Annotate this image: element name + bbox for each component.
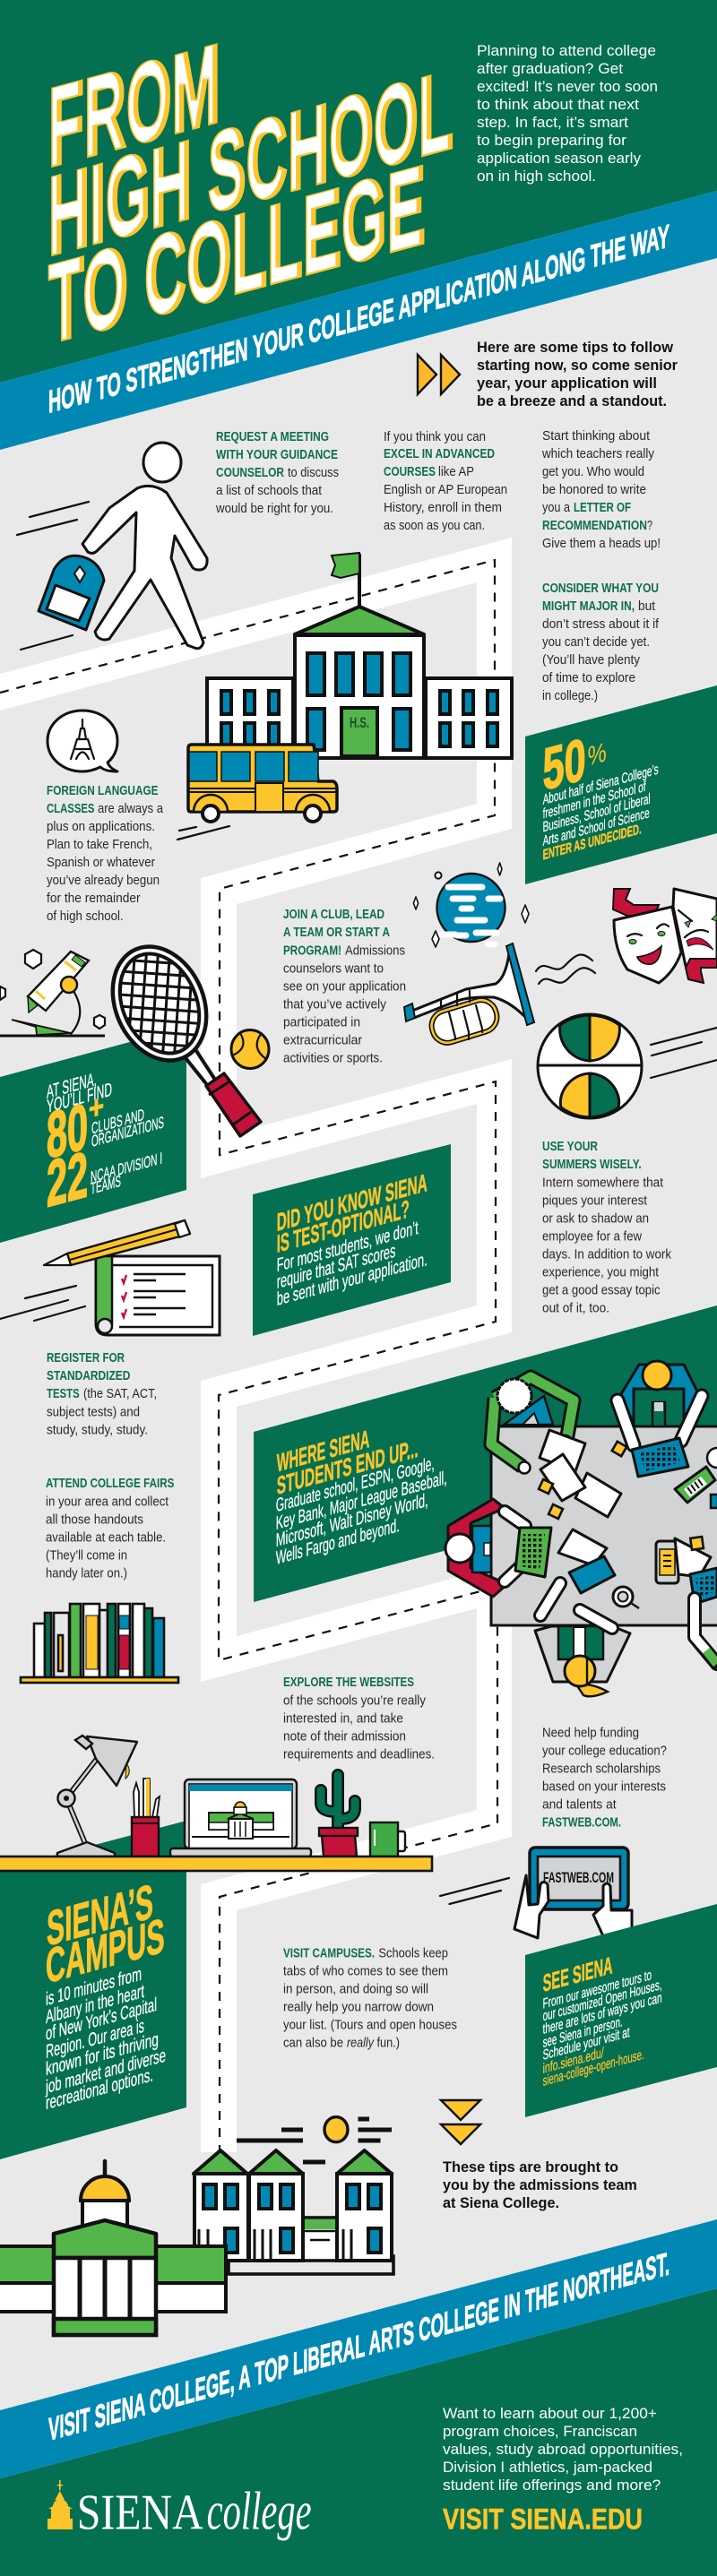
text: need help funding: FASTWEB.COM. xyxy=(542,1815,621,1830)
text: join a club xyxy=(283,908,406,1066)
illustration: hands on tablet: FASTWEB.COM xyxy=(543,1869,614,1886)
text: consider major: MIGHT MAJOR IN, xyxy=(542,599,635,614)
intro paragraph: to think about that next xyxy=(477,96,639,113)
text: visit campuses: can also be xyxy=(283,2036,343,2050)
panel: Siena's campus: of New York’s Capital xyxy=(46,1994,157,2045)
text: advanced courses: as soon as you can. xyxy=(384,519,485,533)
text: college fairs: all those handouts xyxy=(46,1512,143,1527)
logo: Siena College xyxy=(48,2480,312,2541)
text: need help funding: Research scholarships xyxy=(542,1762,661,1776)
illustration: pencil and checklist xyxy=(0,1220,220,1335)
text: foreign language: Plan to take French, xyxy=(47,838,152,852)
text: use your summers: get a good essay topic xyxy=(542,1283,661,1297)
illustration: books on shelf xyxy=(21,1604,178,1683)
blue banner: how to strengthen xyxy=(0,191,717,450)
text: need help funding: and talents at xyxy=(542,1797,617,1812)
desk lamp xyxy=(57,1736,137,1857)
tablet and magnifier xyxy=(569,1556,639,1608)
text: use your summers: or ask to shadow an xyxy=(542,1211,649,1226)
tips intro text: year, your application will xyxy=(477,375,657,392)
laptop xyxy=(170,1779,311,1857)
panel: 50 percent undecided xyxy=(525,685,717,884)
text: advanced courses: EXCEL IN ADVANCED xyxy=(384,447,495,461)
footer text xyxy=(443,2405,683,2494)
illustration: hands on tablet xyxy=(440,1848,632,1940)
illustration: high school building: H.S. xyxy=(350,714,369,731)
text: visit campuses: your list. (Tours and open houses xyxy=(283,2018,457,2032)
text: advanced courses: History, enroll in them xyxy=(384,501,502,515)
text: join a club: see on your application xyxy=(283,980,406,995)
text: join a club: counselors want to xyxy=(283,962,384,977)
illustration: school bus xyxy=(177,745,337,840)
text: request a meeting: COUNSELOR xyxy=(216,466,284,480)
person: green sleeves xyxy=(491,1377,574,1473)
text: letter of recommendation: which teachers really xyxy=(541,447,655,461)
tips intro text xyxy=(477,339,678,409)
title xyxy=(48,21,454,367)
pencil cup xyxy=(132,1779,160,1857)
call to action: visit siena.edu: VISIT SIENA.EDU xyxy=(443,2503,643,2536)
text: letter of recommendation xyxy=(541,429,661,551)
text: consider major: you can’t decide yet. xyxy=(542,635,650,650)
text: join a club: PROGRAM! xyxy=(283,944,341,959)
panel: 50 percent undecided: freshmen in the School of xyxy=(543,779,646,822)
text: letter of recommendation: get you. Who would xyxy=(542,465,644,479)
text: college fairs: (They’ll come in xyxy=(46,1548,127,1563)
text: letter of recommendation: LETTER OF xyxy=(574,501,631,515)
panel: clubs and teams: ORGANIZATIONS xyxy=(91,1113,164,1150)
footer text: Division I athletics, jam-packed xyxy=(443,2459,652,2476)
panel: see Siena: From our awesome tours to xyxy=(543,1967,652,2012)
text: letter of recommendation: ? xyxy=(647,519,652,533)
illustration: students at table xyxy=(445,1361,717,1696)
winding white path xyxy=(0,538,512,2152)
text: visit campuses xyxy=(283,1946,457,2050)
text: foreign language: of high school. xyxy=(47,909,124,924)
footer green panel xyxy=(0,2288,717,2576)
footer text: program choices, Franciscan xyxy=(443,2423,637,2440)
text: college fairs: in your area and collect xyxy=(46,1495,168,1509)
panel: clubs and teams: CLUBS AND xyxy=(91,1105,144,1138)
panel: Siena's campus: known for its thriving xyxy=(46,2029,159,2080)
text: join a club: activities or sports. xyxy=(283,1052,383,1066)
text: use your summers: piques your interest xyxy=(542,1193,647,1208)
person: ponytail xyxy=(535,1583,630,1696)
icon: double arrows xyxy=(418,355,460,394)
text: register for tests: STANDARDIZED xyxy=(47,1369,130,1383)
text: letter of recommendation: be honored to write xyxy=(542,483,646,497)
logo: Siena College: college xyxy=(207,2482,312,2541)
text: join a club: JOIN A CLUB, LEAD xyxy=(283,908,384,922)
icon: microscope xyxy=(0,950,105,1036)
icon: theater masks xyxy=(613,889,717,983)
intro paragraph: after graduation? Get xyxy=(477,60,623,77)
text: request a meeting xyxy=(215,430,339,516)
text: advanced courses: like AP xyxy=(438,465,474,479)
logo: Siena College: SIENA xyxy=(77,2486,203,2541)
panel: where Siena students end up xyxy=(254,1305,717,1602)
footer text: student life offerings and more? xyxy=(443,2477,661,2494)
panel: Siena's campus: CAMPUS xyxy=(46,1908,165,1994)
text: college fairs xyxy=(46,1477,175,1581)
illustration: high school building xyxy=(207,553,512,758)
panel: clubs and teams: + xyxy=(89,1087,104,1127)
icon: trumpet xyxy=(404,943,534,1047)
panel: clubs and teams: TEAMS xyxy=(91,1171,121,1198)
text: request a meeting: REQUEST A MEETING xyxy=(216,430,329,444)
desk top xyxy=(0,1857,432,1871)
text: advanced courses: English or AP European xyxy=(384,483,507,497)
person: red sweater xyxy=(445,1499,551,1597)
panel: see Siena: Schedule your visit at xyxy=(543,2024,630,2063)
panel: did you know: be sent with your application. xyxy=(277,1248,428,1310)
text: request a meeting: WITH YOUR GUIDANCE xyxy=(216,448,338,462)
text: visit campuses: Schools keep xyxy=(378,1946,448,1960)
panel: did you know: DID YOU KNOW SIENA xyxy=(277,1168,428,1237)
text: request a meeting: to discuss xyxy=(288,466,339,480)
illustration: sun and clouds xyxy=(237,2117,392,2162)
text: letter of recommendation: Start thinking about xyxy=(542,429,650,444)
text: foreign language: for the remainder xyxy=(47,892,141,906)
panel: where Siena students end up: Microsoft, Walt Disney World, xyxy=(276,1489,428,1551)
text: explore the websites xyxy=(283,1676,435,1762)
text: visit campuses: fun.) xyxy=(376,2036,400,2050)
panel: see Siena: see Siena in person. xyxy=(543,2013,623,2051)
text: consider major xyxy=(542,582,660,703)
text: use your summers: USE YOUR xyxy=(542,1140,598,1154)
text: use your summers xyxy=(542,1140,672,1315)
panel: Siena's campus: Region. Our area is xyxy=(46,2015,144,2063)
panel: where Siena students end up: Key Bank, Major League Baseball, xyxy=(276,1467,447,1534)
text: visit campuses: really help you narrow down xyxy=(283,2000,434,2014)
panel: clubs and teams: YOU’LL FIND xyxy=(47,1079,112,1117)
text: need help funding: your college education? xyxy=(542,1744,667,1758)
panel: see Siena: info.siena.edu/ xyxy=(543,2045,604,2077)
text: advanced courses: COURSES xyxy=(384,465,436,479)
footer text: values, study abroad opportunities, xyxy=(443,2441,683,2458)
text: request a meeting: a list of schools that xyxy=(216,484,322,498)
intro paragraph xyxy=(477,42,658,185)
text: consider major: but xyxy=(638,599,655,614)
text: foreign language: CLASSES xyxy=(47,802,95,816)
text: college fairs: available at each table. xyxy=(46,1530,166,1545)
illustration: walking student with backpack xyxy=(17,443,207,650)
panel: Siena's campus: recreational options. xyxy=(46,2063,153,2114)
panel: see Siena: SEE SIENA xyxy=(543,1951,613,1997)
text: join a club: A TEAM OR START A xyxy=(283,926,390,940)
text: visit campuses: really xyxy=(347,2036,375,2050)
panel: did you know: For most students, we don’t xyxy=(277,1217,419,1276)
panel: clubs and teams xyxy=(0,1027,186,1243)
mug xyxy=(370,1822,405,1857)
panel: clubs and teams: NCAA DIVISION I xyxy=(91,1149,162,1186)
panel: where Siena students end up: Wells Fargo and beyond. xyxy=(276,1514,400,1569)
cactus xyxy=(319,1775,358,1857)
panel: did you know xyxy=(253,1144,451,1336)
text: these tips brought by: at Siena College. xyxy=(443,2194,559,2211)
text: join a club: that you’ve actively xyxy=(283,998,387,1012)
text: explore the websites: interested in, and take xyxy=(283,1711,403,1726)
text: register for tests: (the SAT, ACT, xyxy=(83,1387,157,1401)
table top xyxy=(491,1426,717,1625)
text: join a club: extracurricular xyxy=(283,1034,362,1048)
intro paragraph: on in high school. xyxy=(477,168,596,185)
panel: 50 percent undecided: % xyxy=(588,737,607,771)
text: consider major: in college.) xyxy=(542,689,598,703)
text: request a meeting: would be right for you. xyxy=(215,502,333,516)
text: consider major: CONSIDER WHAT YOU xyxy=(542,582,659,596)
text: visit campuses: in person, and doing so will xyxy=(283,1982,428,1996)
panel: 50 percent undecided: 50 xyxy=(543,726,586,804)
text: explore the websites: note of their admission xyxy=(283,1729,406,1744)
panel: Siena's campus: SIENA’S xyxy=(47,1874,153,1956)
main dome hall xyxy=(0,2161,226,2335)
text: these tips brought by xyxy=(443,2158,637,2211)
text: use your summers: SUMMERS WISELY. xyxy=(542,1158,642,1172)
icon: basketball xyxy=(538,1014,717,1118)
panel: clubs and teams: 22 xyxy=(47,1138,88,1221)
panel: see Siena xyxy=(525,1904,717,2117)
text: join a club: participated in xyxy=(283,1016,360,1030)
papers and notes xyxy=(540,1430,621,1565)
panel: clubs and teams: AT SIENA, xyxy=(47,1068,97,1103)
header green panel xyxy=(0,0,717,383)
icon: planet xyxy=(413,863,529,947)
panel: 50 percent undecided: Arts and School of Science xyxy=(543,805,650,849)
text: need help funding: based on your interests xyxy=(542,1779,666,1794)
text: explore the websites: of the schools you’re really xyxy=(283,1693,427,1708)
text: visit campuses: tabs of who comes to see them xyxy=(283,1964,448,1978)
text: register for tests: TESTS xyxy=(47,1387,80,1401)
text: letter of recommendation: Give them a heads up! xyxy=(542,537,661,551)
text: advanced courses xyxy=(384,430,507,533)
text: college fairs: handy later on.) xyxy=(46,1566,127,1581)
panel: clubs and teams: 80 xyxy=(47,1090,88,1173)
icon: down arrows xyxy=(441,2100,480,2144)
text: need help funding: Need help funding xyxy=(542,1726,639,1740)
text: consider major: (You’ll have plenty xyxy=(542,653,641,668)
panel: did you know: IS TEST-OPTIONAL? xyxy=(277,1195,410,1259)
text: advanced courses: If you think you can xyxy=(384,430,486,444)
text: need help funding xyxy=(542,1726,667,1830)
text: explore the websites: EXPLORE THE WEBSITES xyxy=(283,1676,414,1690)
text: foreign language xyxy=(47,784,164,924)
panel: where Siena students end up: STUDENTS END UP... xyxy=(277,1434,419,1501)
icon: speech bubble with Eiffel tower xyxy=(48,711,117,771)
text: college fairs: ATTEND COLLEGE FAIRS xyxy=(46,1477,175,1491)
panel: Siena's campus: job market and diverse xyxy=(45,2045,166,2098)
panel: Siena's campus xyxy=(0,1821,186,2159)
text: use your summers: experience, you might xyxy=(542,1265,659,1279)
icon: tennis racket xyxy=(95,932,261,1136)
panel: where Siena students end up: Graduate school, ESPN, Google, xyxy=(276,1452,435,1516)
blue banner: visit Siena xyxy=(0,2219,717,2478)
text: register for tests: study, study, study. xyxy=(47,1423,148,1437)
panel: where Siena students end up: WHERE SIENA xyxy=(277,1425,369,1478)
panel: did you know: require that SAT scores xyxy=(277,1240,395,1293)
tips intro text: Here are some tips to follow xyxy=(477,339,674,356)
icon: wave lines xyxy=(536,954,595,984)
text: letter of recommendation: you a xyxy=(542,501,571,515)
text: foreign language: plus on applications. xyxy=(47,820,155,834)
text: consider major: don’t stress about it if xyxy=(542,617,660,632)
panel: Siena's campus: Albany in the heart xyxy=(46,1980,144,2028)
panel: 50 percent undecided: Business, School of Liberal xyxy=(543,791,651,835)
text: foreign language: you’ve already begun xyxy=(47,874,160,888)
icon: tennis ball xyxy=(231,1030,269,1068)
text: join a club: Admissions xyxy=(345,944,405,959)
footer text: Want to learn about our 1,200+ xyxy=(443,2405,657,2422)
text: consider major: of time to explore xyxy=(542,671,635,685)
panel: see Siena: siena-college-open-house. xyxy=(543,2046,644,2089)
text: foreign language: Spanish or whatever xyxy=(47,856,155,870)
text: use your summers: out of it, too. xyxy=(542,1301,609,1315)
tips intro text: be a breeze and a standout. xyxy=(477,392,667,409)
text: these tips brought by: you by the admissions team xyxy=(443,2176,637,2193)
intro paragraph: step. In fact, it’s smart xyxy=(477,114,628,131)
text: foreign language: FOREIGN LANGUAGE xyxy=(47,784,159,798)
text: explore the websites: requirements and deadlines. xyxy=(283,1747,435,1762)
illustration: desk with lamp, laptop and cactus xyxy=(0,1736,432,1871)
phone xyxy=(675,1448,717,1508)
text: use your summers: Intern somewhere that xyxy=(542,1176,663,1190)
text: these tips brought by: These tips are brought to xyxy=(443,2158,618,2175)
text: use your summers: employee for a few xyxy=(542,1229,642,1244)
panel: 50 percent undecided: ENTER AS UNDECIDED. xyxy=(543,821,642,863)
text: register for tests xyxy=(47,1351,157,1437)
tips intro text: starting now, so come senior xyxy=(477,357,678,374)
intro paragraph: excited! It’s never too soon xyxy=(477,78,658,95)
illustration: Siena campus buildings xyxy=(0,2150,393,2335)
intro paragraph: to begin preparing for xyxy=(477,132,626,149)
panel: Siena's campus: is 10 minutes from xyxy=(46,1963,142,2010)
person: blue shoulders xyxy=(618,1361,702,1477)
text: register for tests: subject tests) and xyxy=(47,1405,140,1419)
intro paragraph: Planning to attend college xyxy=(477,42,656,59)
text: foreign language: are always a xyxy=(98,802,164,816)
intro paragraph: application season early xyxy=(477,150,641,167)
text: register for tests: REGISTER FOR xyxy=(47,1351,125,1366)
text: visit campuses: VISIT CAMPUSES. xyxy=(283,1946,375,1960)
text: letter of recommendation: RECOMMENDATION xyxy=(542,519,647,533)
person: right side with phone xyxy=(656,1537,717,1664)
text: use your summers: days. In addition to work xyxy=(542,1247,672,1262)
